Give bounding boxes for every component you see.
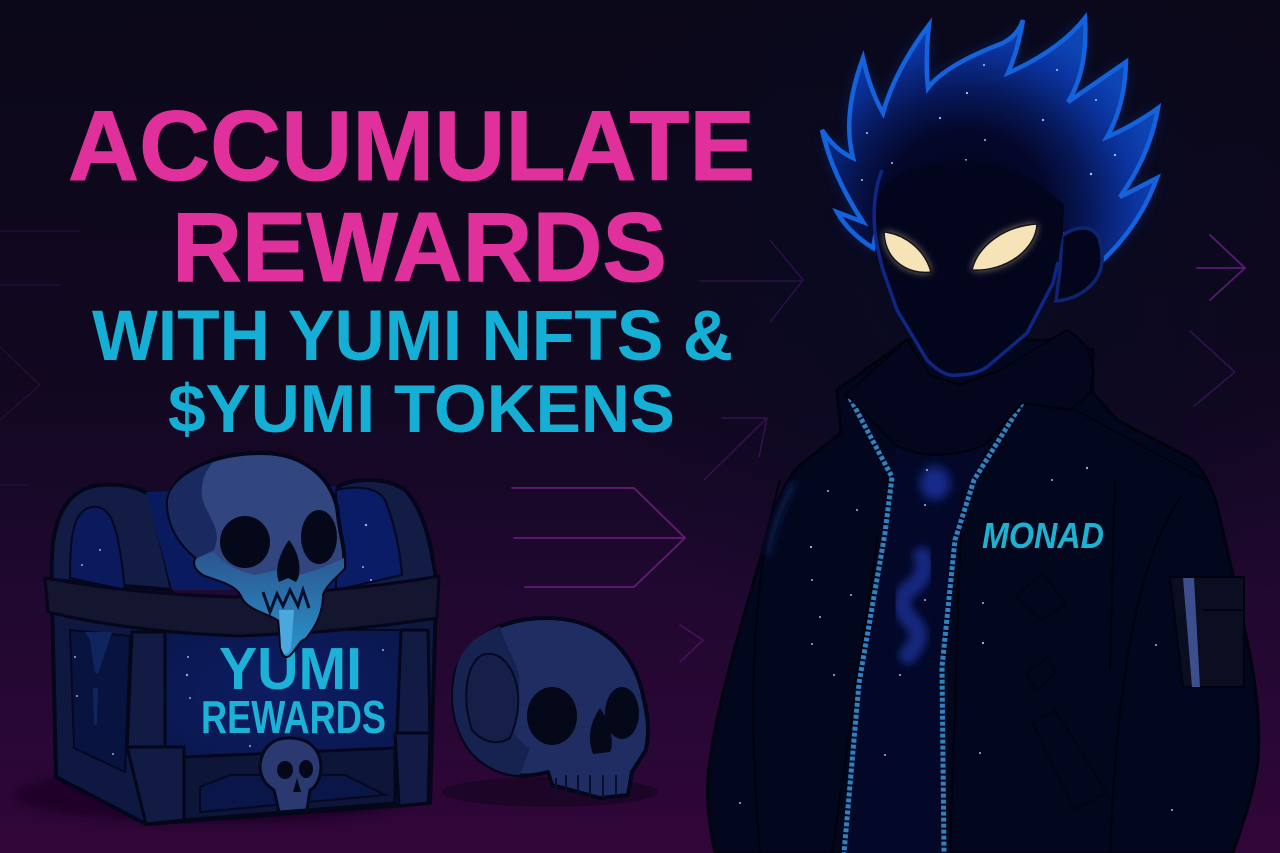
subtitle: with yumi nfts and tokens: WITH YUMI NFTS &: [92, 297, 733, 376]
face outline: [874, 170, 1058, 375]
skull shadow: [442, 777, 658, 807]
lid blue panels: [146, 486, 365, 590]
background arrows: [0, 231, 1245, 662]
head: [875, 160, 1064, 375]
chest lower recess: [200, 775, 385, 812]
chest label: YUMI: [219, 636, 362, 702]
chest label: [201, 636, 386, 743]
right zipper: [942, 403, 1022, 853]
eye glow: [884, 224, 1037, 272]
sleeve pocket: [1170, 577, 1244, 687]
ear: [1056, 228, 1102, 301]
title: accumulate rewards: ACCUMULATE: [68, 90, 755, 201]
chest shadow: [15, 767, 415, 823]
chest left face: [70, 630, 130, 772]
title: accumulate rewards: [68, 90, 755, 302]
big skull: [168, 453, 344, 656]
chest stars: [74, 524, 384, 755]
chest glow: [902, 466, 950, 655]
jacket seams: [753, 407, 1205, 853]
hair glow: [822, 18, 1158, 260]
subtitle: with yumi nfts and tokens: $YUMI TOKENS: [168, 371, 675, 447]
hair stars: [861, 64, 1116, 214]
jacket: [708, 330, 1259, 853]
collar: [845, 330, 1093, 455]
skull shape: [453, 618, 648, 798]
subtitle: with yumi nfts and tokens: [92, 297, 733, 447]
chest body: [52, 600, 436, 824]
chest label: REWARDS: [201, 691, 386, 743]
slime drips: [85, 632, 112, 725]
title: accumulate rewards: REWARDS: [172, 192, 667, 302]
monad label: MONAD: [982, 515, 1104, 556]
chest pillars: [127, 630, 430, 824]
chest lid: [52, 480, 436, 590]
chest band: [45, 576, 439, 636]
ground skull: [442, 618, 658, 807]
treasure chest: [15, 453, 439, 824]
hair: [822, 18, 1158, 260]
jacket diamonds and pocket: [1016, 573, 1107, 810]
jacket stars: [739, 467, 1173, 811]
small skull: [260, 738, 321, 812]
character: [708, 18, 1259, 853]
chest front panel: [165, 630, 401, 760]
shirt: [844, 400, 1005, 853]
left zipper: [844, 398, 892, 853]
eyes: [884, 224, 1037, 272]
